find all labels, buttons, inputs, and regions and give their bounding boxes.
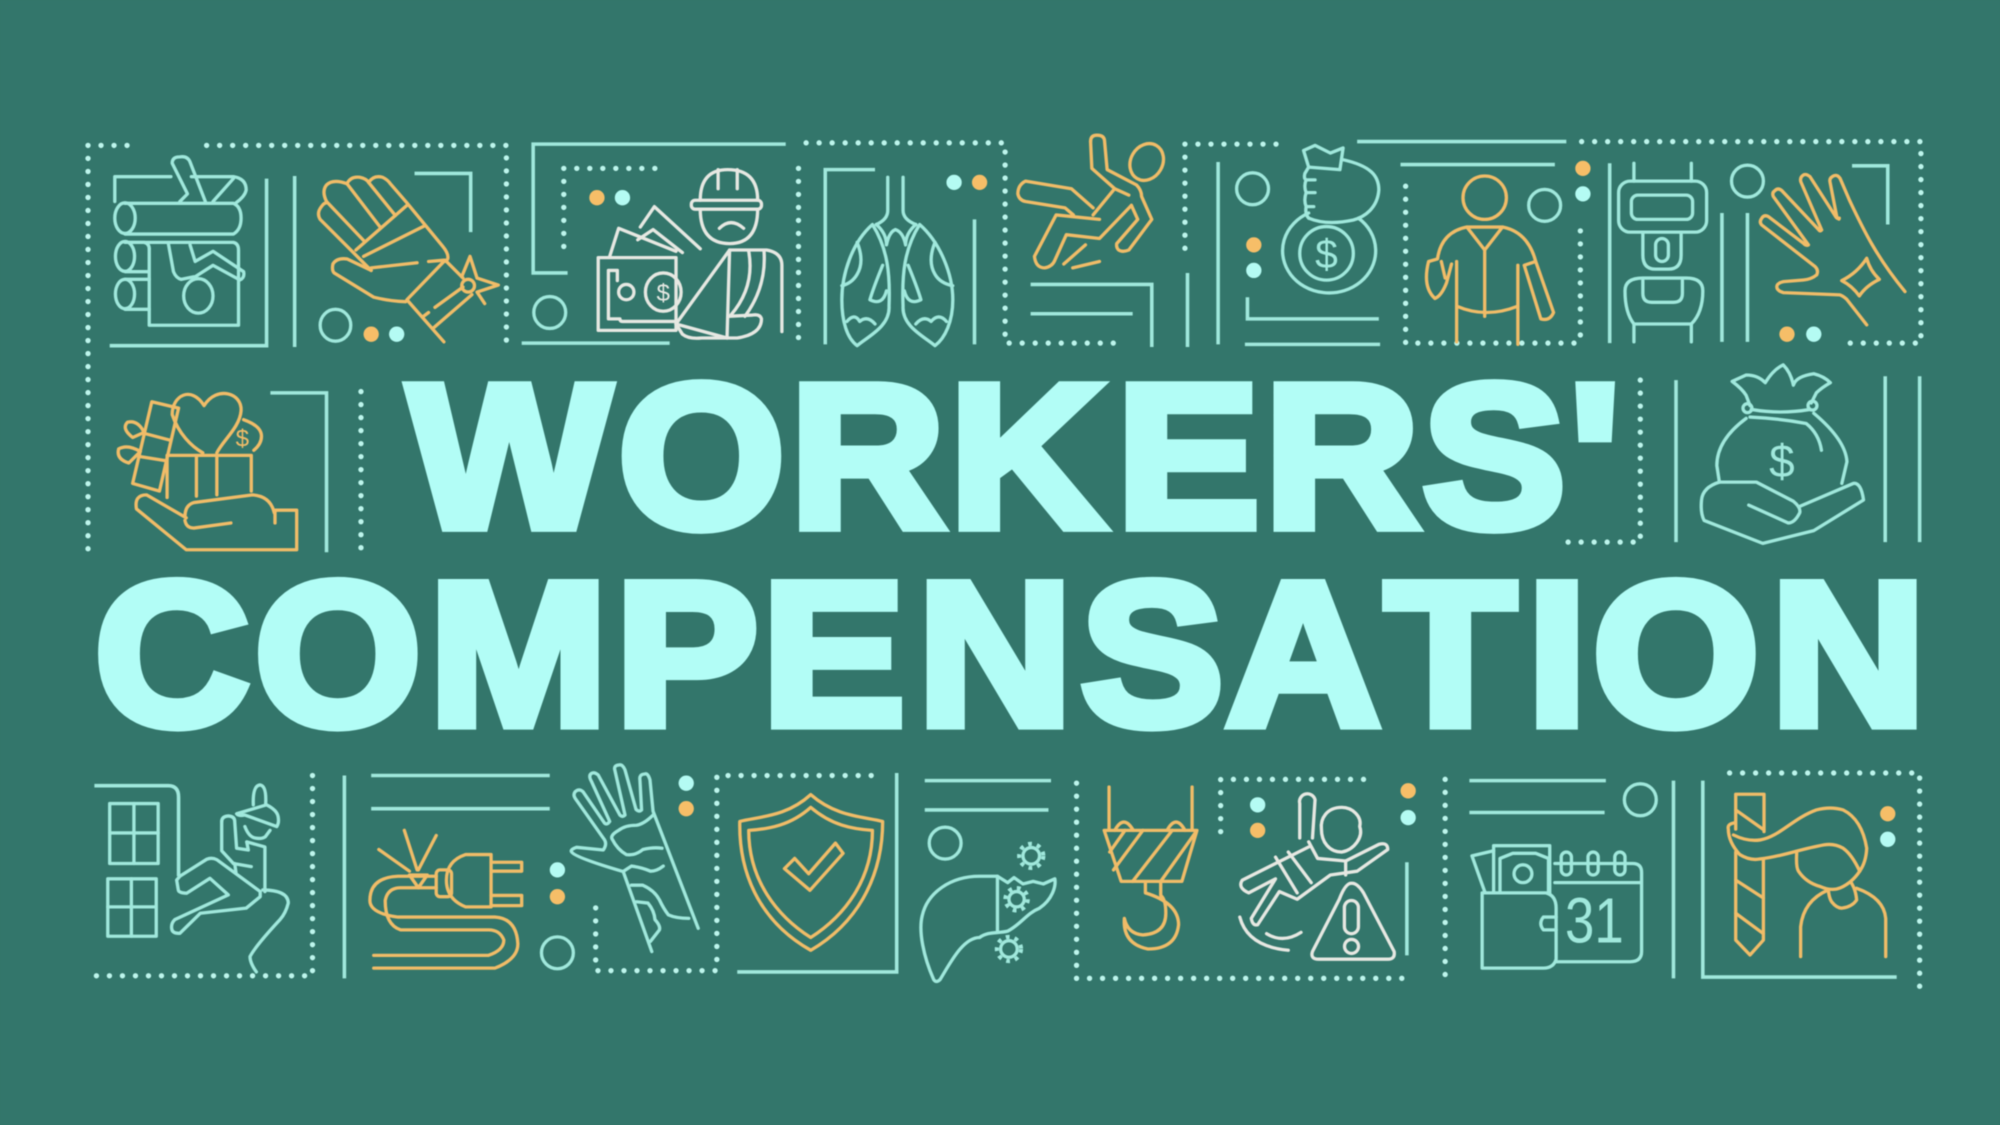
icon: injured worker holding cash [598, 170, 782, 338]
icon: person falling from building [108, 785, 288, 972]
accent circles and dots [320, 161, 1895, 969]
title: COMPENSATION [95, 541, 1926, 768]
icon: liver with gears [921, 844, 1055, 982]
icon: wallet and calendar: 31 [1565, 885, 1624, 957]
icon: crane hook [1104, 787, 1197, 949]
icon: gift in hand [118, 393, 297, 550]
icon: seat belt buckle [1619, 163, 1707, 342]
icon: falling man [1018, 135, 1170, 268]
icon: gift in hand: $ [236, 425, 250, 452]
icon: person strangled by long tie [1728, 794, 1886, 957]
icon: fist holding money bag [1283, 145, 1379, 293]
icon: money bag on hand: $ [1769, 435, 1795, 487]
title: WORKERS' [408, 343, 1620, 571]
decorative frames: solid rules [94, 142, 1920, 978]
icon: shield with check [740, 795, 883, 950]
icon: money bag on hand [1701, 365, 1864, 543]
icon: injured hand [319, 177, 498, 342]
icon: fist holding money bag: $ [1315, 231, 1338, 277]
icon: logs crushing a person [115, 157, 246, 325]
icon: wallet and calendar [1472, 846, 1642, 968]
icon: person slipping with warning sign [1240, 794, 1394, 959]
decorative frames: dotted rules [88, 142, 1921, 989]
icon: burned hand [571, 765, 698, 952]
icon: injured torso in jacket [1426, 176, 1554, 344]
icon: damaged lungs [842, 177, 953, 346]
title [95, 343, 1926, 768]
icon: wounded hand with diamond patch [1760, 175, 1905, 325]
icon: damaged electrical plug [370, 830, 522, 968]
icon: injured worker holding cash: $ [657, 280, 671, 307]
